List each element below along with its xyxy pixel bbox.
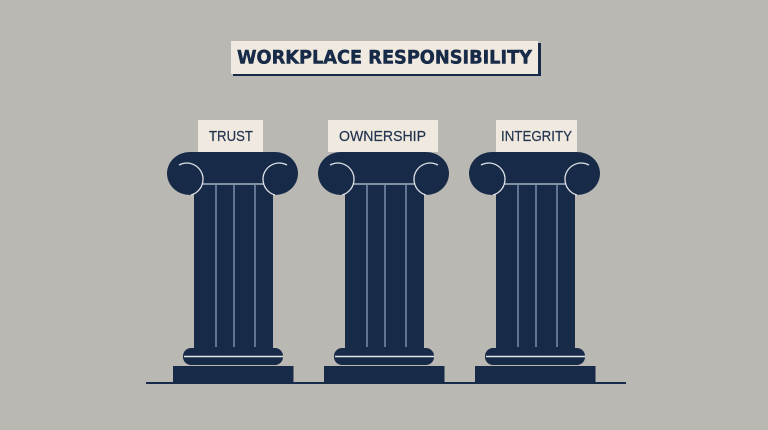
label: ownership [328,120,438,152]
label: integrity [496,120,577,152]
pillar: ownership [318,120,449,384]
pillar: trust [167,120,298,384]
title text: WORKPLACE RESPONSIBILITY [237,48,533,68]
ground line [146,382,626,384]
label: ownership: OWNERSHIP [339,129,426,145]
title banner [231,41,541,76]
pillar: integrity [469,120,600,384]
label: integrity: INTEGRITY [501,129,572,145]
label: trust [198,120,263,152]
label: trust: TRUST [209,129,253,145]
